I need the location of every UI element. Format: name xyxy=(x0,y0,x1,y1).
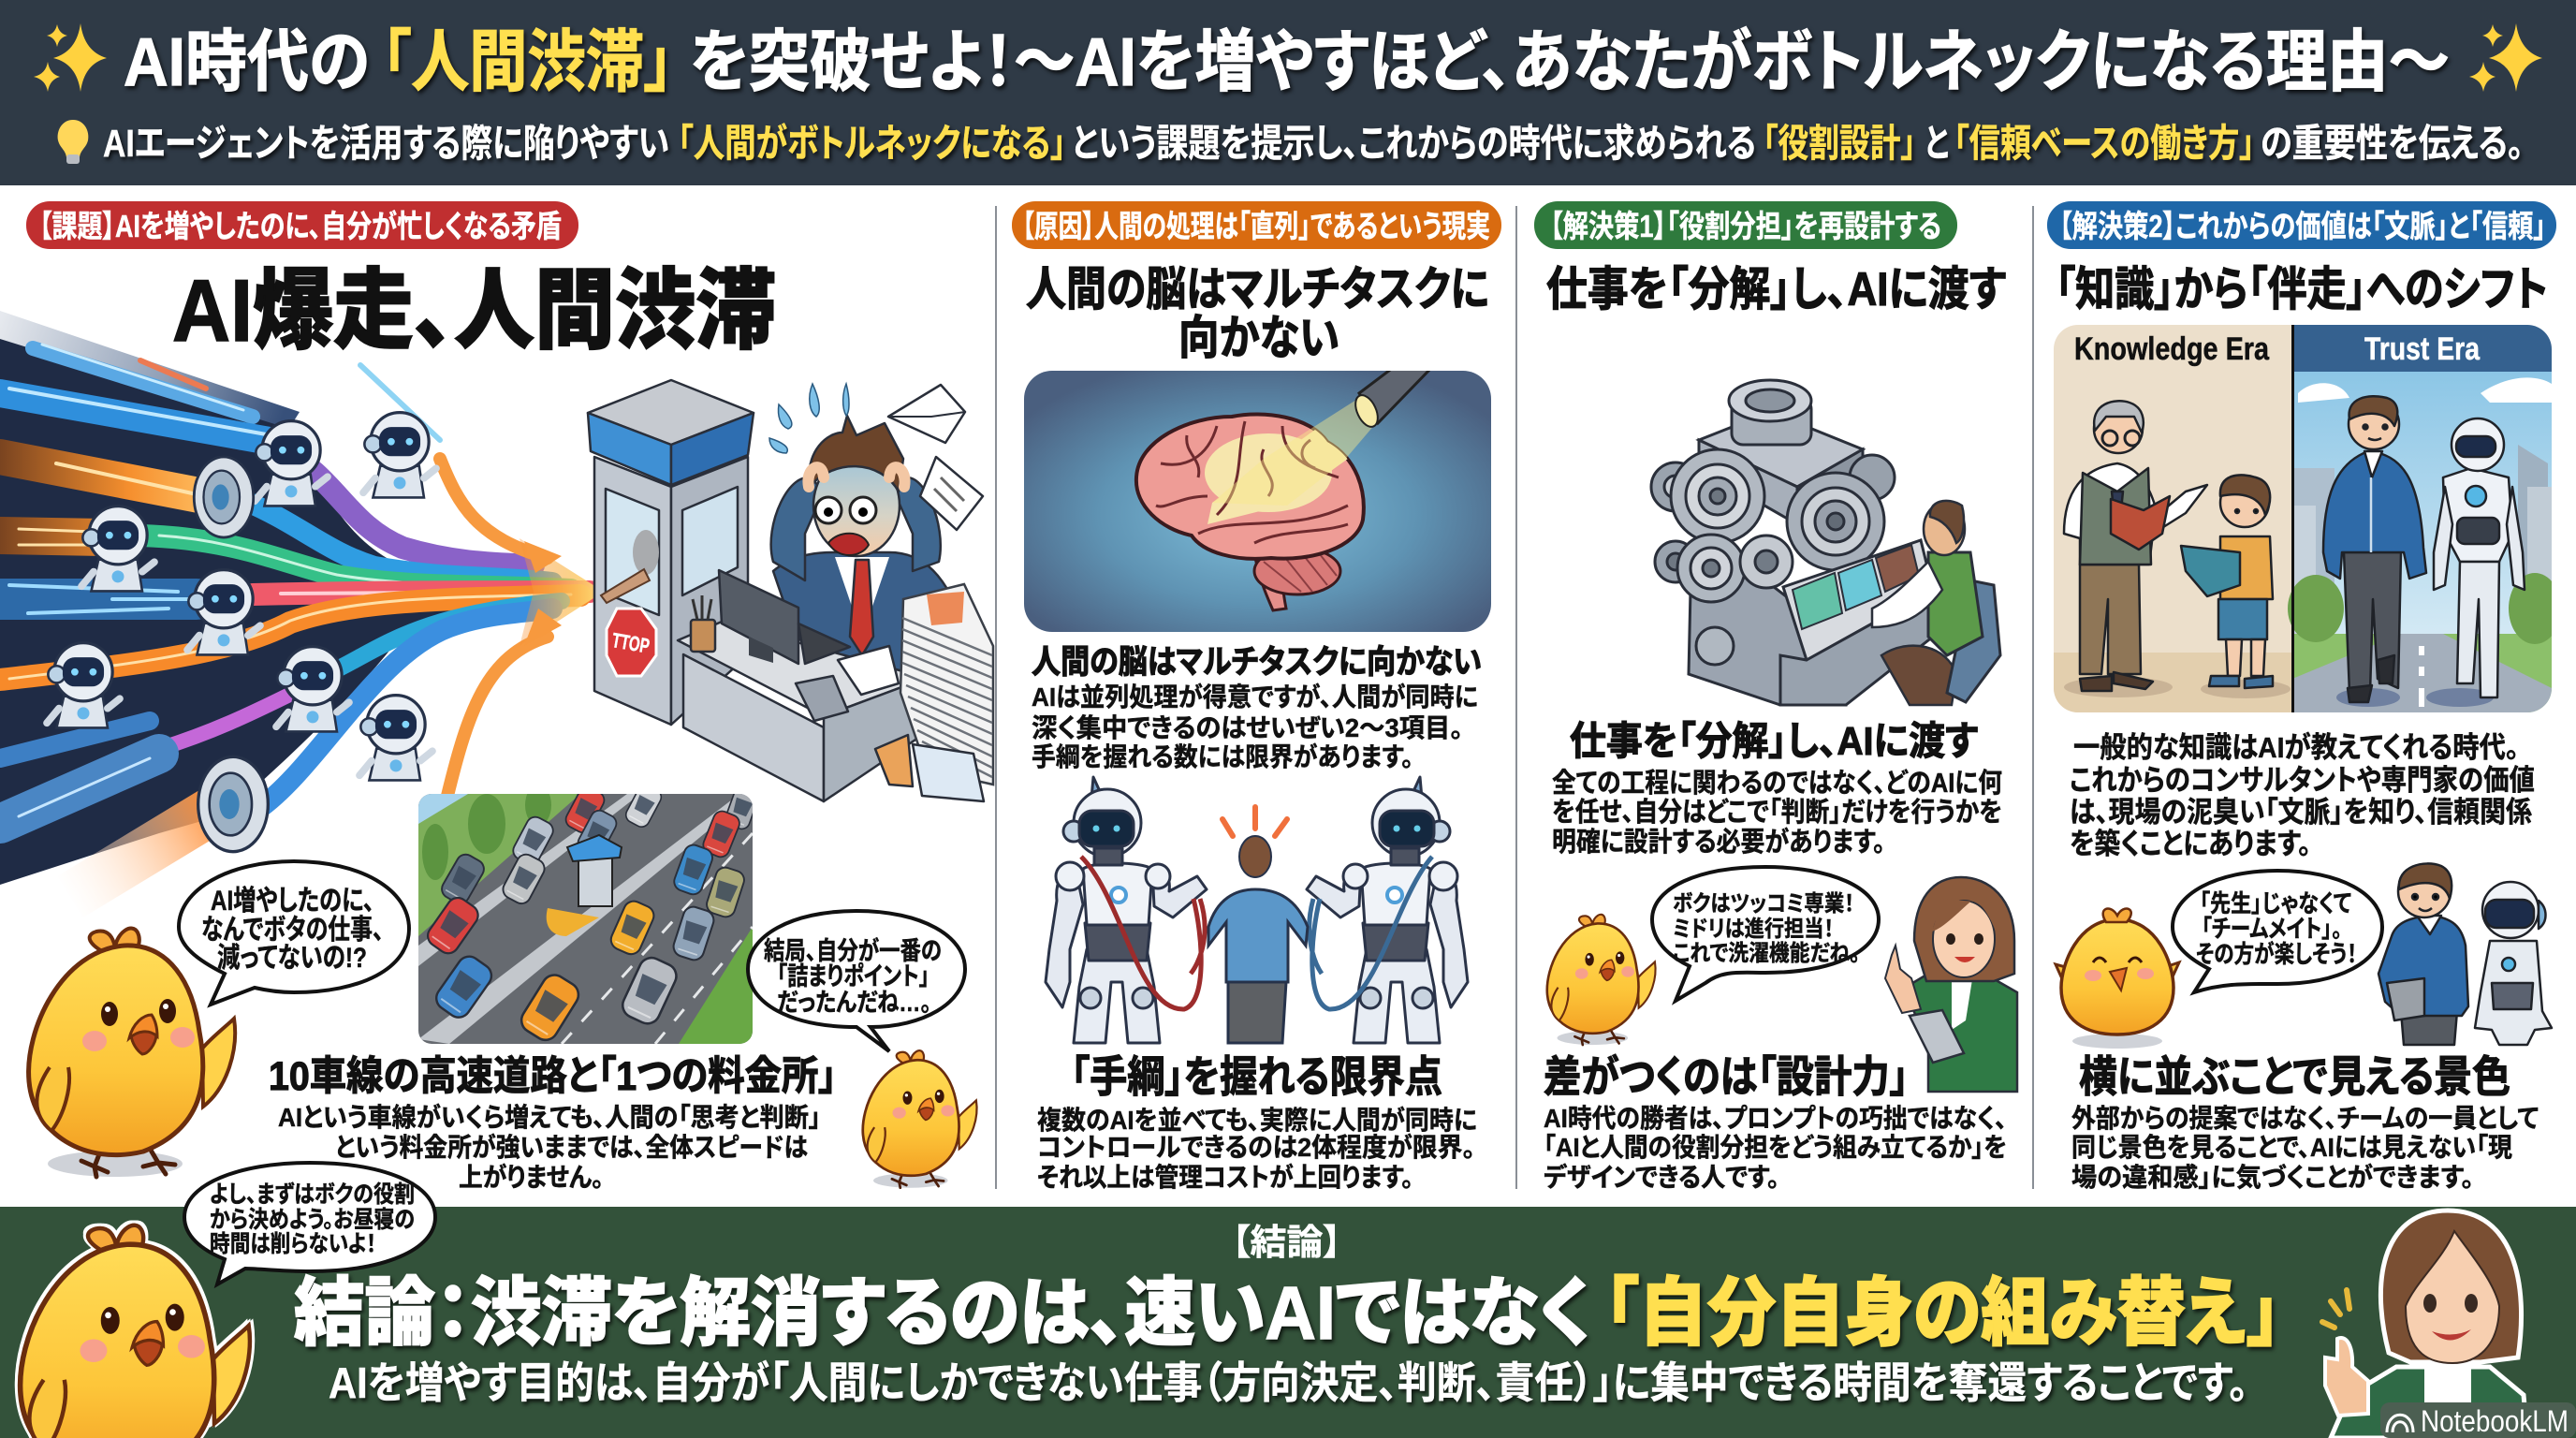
crumpled papers xyxy=(875,735,984,801)
panel: 課題 xyxy=(0,201,993,1192)
heading: 人間の脳はマルチタスクに向かない xyxy=(1026,263,1489,364)
icon: stop sign xyxy=(607,609,656,676)
subtitle: と xyxy=(1925,122,1949,165)
panel: 解決策2 xyxy=(2047,201,2561,1192)
paper stack xyxy=(900,584,993,785)
icons: small robots xyxy=(47,413,436,852)
body text: teammate view xyxy=(2071,1104,2539,1192)
accent dashes xyxy=(2322,1290,2349,1328)
side: Trust Era xyxy=(2288,325,2561,712)
body text: decompose work: を任せ、自分はどこで「判断」だけを行うかを xyxy=(1552,797,2002,828)
sweat drops xyxy=(769,384,849,453)
pill: 解決策1 xyxy=(1534,201,1957,249)
body text: teammate view: 同じ景色を見ることで、AIには見えない「現 xyxy=(2071,1133,2512,1162)
mini toll booth xyxy=(567,835,622,906)
subheading: 横に並ぶことで見える景色: 横に並ぶことで見える景色 xyxy=(2079,1052,2510,1101)
speech bubble: bottom chick: 時間は削らないよ！ xyxy=(210,1231,376,1257)
illustration: AI streams converging xyxy=(0,311,604,897)
body text: trust era value: 一般的な知識はAIが教えてくれる時代。 xyxy=(2073,731,2519,764)
side: Knowledge Era xyxy=(2054,325,2292,712)
body text: teammate view: 外部からの提案ではなく、チームの一員として xyxy=(2071,1104,2539,1133)
icon: envelope xyxy=(888,385,965,443)
body text: toll booth explanation: という料金所が強いままでは、全体スピードは xyxy=(335,1132,808,1162)
body text: teammate view: 場の違和感」に気づくことができます。 xyxy=(2071,1162,2474,1192)
speech bubble: left chick xyxy=(179,861,409,1005)
icon: sparkles left xyxy=(34,23,107,92)
body text: serial attention: AIは並列処理が得意ですが、人間が同時に xyxy=(1032,682,1478,712)
illustration: person holding reins of two robots xyxy=(1046,777,1468,1043)
body text: toll booth explanation: 上がりません。 xyxy=(459,1162,604,1192)
subheading: 仕事を「分解」し、AIに渡す: 仕事を「分解」し、AIに渡す xyxy=(1570,719,1978,763)
body text: decompose work xyxy=(1552,768,2002,858)
character: man with laptop xyxy=(2378,863,2468,1045)
character: bottom chick xyxy=(21,1225,250,1438)
heading: 仕事を「分解」し、AIに渡す: 仕事を「分解」し、AIに渡す xyxy=(1546,263,2006,315)
body text: design skill: AI時代の勝者は、プロンプトの巧拙ではなく、 xyxy=(1544,1104,2007,1133)
body text: reins limit xyxy=(1037,1105,1477,1192)
character: chick xyxy=(1547,915,1656,1045)
subtitle: という課題を提示し、これからの時代に求められる xyxy=(1072,122,1756,165)
body text: toll booth explanation: AIという車線がいくら増えても、人間の「思考と判断」 xyxy=(278,1102,821,1132)
man in suit xyxy=(771,416,959,683)
subtitle xyxy=(103,122,2524,165)
illustration: brain under spotlight xyxy=(1024,356,1491,632)
pill: 原因: 【原因】人間の処理は「直列」であるという現実 xyxy=(1022,209,1490,243)
speech bubble: right chick: 結局、自分が一番の xyxy=(764,936,942,965)
body text: serial attention xyxy=(1032,682,1478,771)
body text: reins limit: それ以上は管理コストが上回ります。 xyxy=(1037,1162,1413,1192)
speech bubble: left chick: なんでボタの仕事、 xyxy=(201,915,384,946)
title: 「人間渋滞」 xyxy=(382,25,673,100)
subtitle: 「信頼ベースの働き方」 xyxy=(1954,122,2255,165)
subtitle: AIエージェントを活用する際に陥りやすい xyxy=(103,122,669,165)
illustration: machine with operator xyxy=(1651,380,2000,705)
subheading: 「手綱」を握れる限界点: 「手綱」を握れる限界点 xyxy=(1071,1052,1442,1101)
body text: serial attention: 深く集中できるのはせいぜい2〜3項目。 xyxy=(1032,713,1463,742)
subtitle: 「役割設計」 xyxy=(1763,122,1916,165)
cars xyxy=(424,783,760,1045)
pill: 解決策2 xyxy=(2047,201,2556,249)
body text: serial attention: 手綱を握れる数には限界があります。 xyxy=(1032,741,1413,771)
character: chick waving xyxy=(29,929,235,1177)
speech bubble: チームメイト: 「先生」じゃなくて xyxy=(2200,889,2351,917)
speech bubble: left chick: AI増やしたのに、 xyxy=(211,886,374,917)
conclusion band xyxy=(0,1163,2576,1438)
heading: 人間の脳はマルチタスクに向かない: 人間の脳はマルチタスクに xyxy=(1026,263,1489,315)
conclusion body: AIを増やす目的は、自分が「人間にしかできない仕事（方向決定、判断、責任）」に集中できる時間を奪還することです。 xyxy=(329,1358,2248,1407)
character: worried chick xyxy=(863,1050,977,1188)
speech bubble: bottom chick: よし、まずはボクの役割 xyxy=(210,1181,415,1208)
character: happy chick xyxy=(2056,909,2179,1049)
illustration: highway with single toll booth xyxy=(418,783,760,1045)
speech bubble: チームメイト: その方が楽しそう！ xyxy=(2196,940,2357,968)
illustration: toll booth and panicking worker xyxy=(588,380,993,801)
header banner xyxy=(0,0,2576,185)
speech bubble: ボケ担当 xyxy=(1652,867,1879,1001)
body text: trust era value: は、現場の泥臭い「文脈」を知り、信頼関係 xyxy=(2070,796,2532,829)
subtitle: 「人間がボトルネックになる」 xyxy=(678,122,1066,165)
speech bubble: right chick: 「詰まりポイント」 xyxy=(777,962,929,990)
title: AI時代の xyxy=(124,25,370,100)
subheading: 人間の脳はマルチタスクに向かない: 人間の脳はマルチタスクに向かない xyxy=(1032,644,1482,681)
body text: reins limit: コントロールできるのは2体程度が限界。 xyxy=(1037,1132,1475,1162)
icon: sparkles right xyxy=(2469,23,2542,92)
subtitle: の重要性を伝える。 xyxy=(2261,122,2524,165)
body text: decompose work: 明確に設計する必要があります。 xyxy=(1552,826,1885,858)
side: Trust Era: Trust Era xyxy=(2364,331,2481,367)
body text: reins limit: 複数のAIを並べても、実際に人間が同時に xyxy=(1037,1105,1477,1135)
speech bubble: left chick: 減ってないの!? xyxy=(217,943,367,974)
body text: design skill xyxy=(1544,1104,2007,1192)
body text: design skill: 「AIと人間の役割分担をどう組み立てるか」を xyxy=(1544,1133,2007,1162)
speech bubble: ボケ担当: これで洗濯機能だね。 xyxy=(1673,941,1860,966)
subheading: 差がつくのは「設計力」: 差がつくのは「設計力」 xyxy=(1544,1052,1909,1101)
pill: 原因 xyxy=(1012,201,1501,249)
panel: 解決策1 xyxy=(1534,201,2017,1192)
speech bubble: right chick: だったんだね…。 xyxy=(777,989,931,1017)
pill: 解決策1: 【解決策1】「役割分担」を再設計する xyxy=(1550,209,1941,243)
speech bubble: ボケ担当: ミドリは進行担当！ xyxy=(1673,917,1834,942)
body text: trust era value: を築くことにあります。 xyxy=(2070,828,2311,860)
illustration: Knowledge Era vs Trust Era xyxy=(2054,325,2561,712)
speech bubble: チームメイト: 「チームメイト」。 xyxy=(2202,915,2342,943)
character: thumbs-up woman xyxy=(2325,1211,2527,1438)
icon: flying document xyxy=(920,457,983,530)
speech bubble: right chick xyxy=(748,911,965,1051)
title: を突破せよ！〜AIを増やすほど、あなたがボトルネックになる理由〜 xyxy=(690,25,2450,100)
body text: design skill: デザインできる人です。 xyxy=(1544,1162,1779,1192)
icon: light bulb xyxy=(58,120,88,164)
conclusion headline xyxy=(294,1271,2281,1355)
body text: decompose work: 全ての工程に関わるのではなく、どのAIに何 xyxy=(1552,768,2002,799)
body text: trust era value xyxy=(2070,731,2535,860)
speech bubble: bottom chick xyxy=(184,1163,435,1284)
character: woman with tablet xyxy=(1885,877,2017,1092)
speech bubble: bottom chick: から決めよう。お昼寝の xyxy=(210,1207,415,1233)
body text: toll booth explanation xyxy=(278,1102,821,1192)
conclusion headline: 結論：渋滞を解消するのは、速いAIではなく xyxy=(294,1271,1591,1355)
panel: 原因 xyxy=(1012,201,1501,1192)
speech bubble: ボケ担当: ボクはツッコミ専業！ xyxy=(1673,891,1854,917)
character: teammate robot xyxy=(2475,882,2552,1045)
icon: stop sign: TTOP xyxy=(610,628,651,658)
side: Knowledge Era: Knowledge Era xyxy=(2074,331,2270,367)
heading: 人間の脳はマルチタスクに向かない: 向かない xyxy=(1178,312,1339,364)
pill: 課題: 【課題】AIを増やしたのに、自分が忙しくなる矛盾 xyxy=(39,209,562,243)
pill: 課題 xyxy=(26,201,578,249)
label: 結論: 【結論】 xyxy=(1232,1224,1341,1263)
heading: AI爆走、人間渋滞: AI爆走、人間渋滞 xyxy=(172,261,776,360)
speech bubble: チームメイト xyxy=(2173,871,2382,992)
conclusion headline: 「自分自身の組み替え」 xyxy=(1604,1271,2281,1355)
heading: 10車線の高速道路と「1つの料金所」: 10車線の高速道路と「1つの料金所」 xyxy=(269,1054,837,1099)
